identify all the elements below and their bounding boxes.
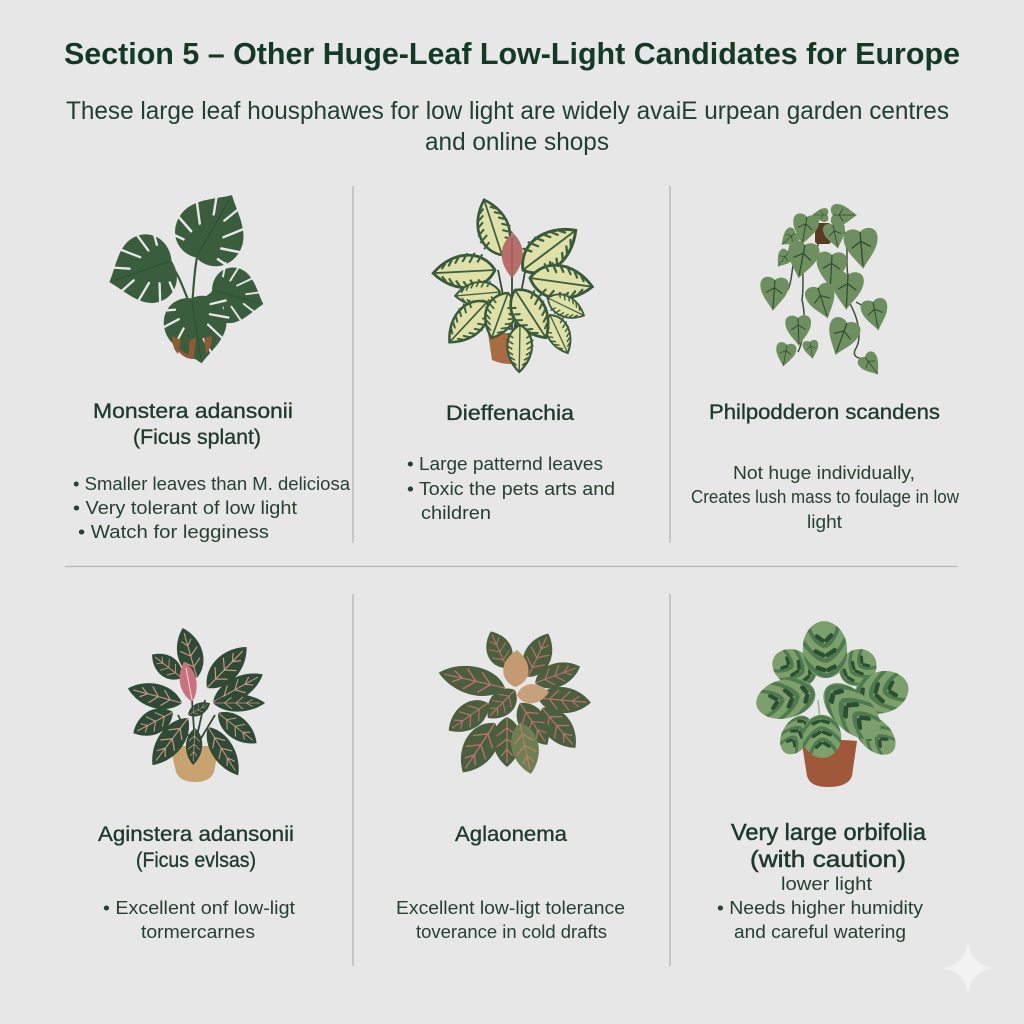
- plant name: Aginstera adansonii: [98, 822, 294, 846]
- bullet list: [73, 473, 351, 542]
- plant name: Monstera adansonii: [93, 399, 293, 423]
- icon: sparkle watermark: [943, 943, 993, 993]
- icon: monstera plant: [97, 177, 271, 368]
- bullet list: [717, 873, 924, 942]
- bullet list: • Toxic the pets arts and: [407, 478, 615, 499]
- bullet list: and careful watering: [734, 921, 906, 942]
- plant name: Very large orbifolia: [731, 819, 926, 845]
- panel: Philodendron scandens: [691, 204, 960, 532]
- plant name: Aglaonema: [455, 822, 567, 846]
- plant name: (Ficus evlsas): [136, 848, 256, 872]
- bullet list: • Smaller leaves than M. deliciosa: [73, 473, 351, 494]
- bullet list: [103, 897, 295, 942]
- panel: Monstera adansonii: [73, 177, 351, 542]
- icon: pink-veined plant: [125, 625, 268, 782]
- plant name: Philpodderon scandens: [709, 400, 940, 424]
- description: [691, 462, 960, 532]
- icon: trailing philodendron: [759, 204, 892, 381]
- bullet list: • Excellent onf low-ligt: [103, 897, 295, 918]
- icon: orbifolia plant in terracotta pot: [752, 619, 914, 787]
- plant name: [93, 399, 293, 449]
- description: Excellent low-ligt tolerance: [396, 897, 625, 918]
- subtitle: These large leaf housphawes for low light are widely avaiE urpean garden centres: [66, 97, 949, 125]
- bullet list: • Watch for legginess: [78, 521, 269, 542]
- plant name: [731, 819, 926, 872]
- plant name: (Ficus splant): [133, 425, 261, 449]
- bullet list: tormercarnes: [141, 921, 255, 942]
- subtitle: and online shops: [425, 128, 609, 156]
- description: [396, 897, 625, 942]
- bullet list: • Needs higher humidity: [717, 897, 924, 918]
- bullet list: • Large patternd leaves: [407, 453, 603, 474]
- icon: aglaonema plant: [436, 626, 592, 781]
- icon: dieffenbachia plant: [432, 195, 595, 372]
- panel: Dieffenachia: [407, 195, 615, 523]
- bullet list: [407, 453, 615, 523]
- plant name: Dieffenachia: [446, 401, 574, 425]
- bullet list: • Very tolerant of low light: [73, 497, 297, 518]
- panel: Calathea orbifolia: [717, 619, 926, 942]
- panel: Aginstera adansonii: [98, 625, 295, 942]
- title: Section 5 – Other Huge-Leaf Low-Light Candidates for Europe: [64, 36, 960, 71]
- panel: Aglaonema: [396, 626, 625, 942]
- description: Creates lush mass to foulage in low: [691, 486, 960, 507]
- description: light: [807, 511, 842, 532]
- subtitle: [66, 97, 949, 156]
- bullet list: children: [421, 502, 491, 523]
- plant name: [98, 822, 294, 872]
- description: toverance in cold drafts: [416, 921, 607, 942]
- bullet list: lower light: [781, 873, 872, 894]
- description: Not huge individually,: [733, 462, 915, 483]
- plant name: (with caution): [750, 846, 906, 872]
